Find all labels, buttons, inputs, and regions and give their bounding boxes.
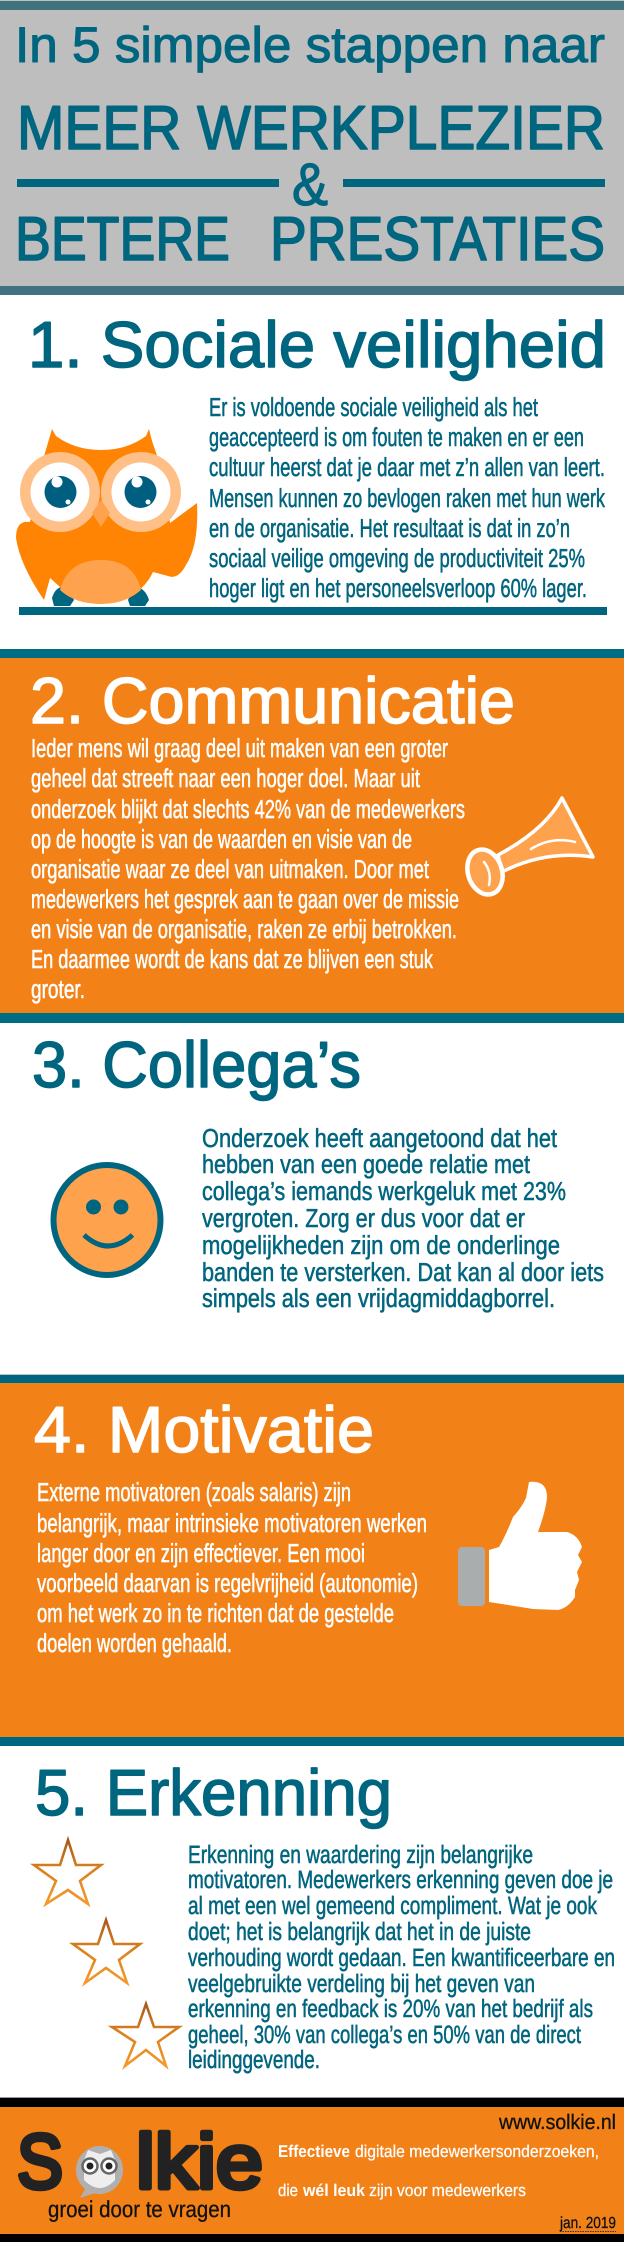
website: www.solkie.nl (498, 2111, 616, 2134)
icon: thumbs up (458, 1482, 582, 1610)
heading: intro line: In 5 simpele stappen naar (15, 17, 605, 73)
panel: 5 erkenning (34, 1756, 615, 2074)
text block: collega's (202, 1123, 604, 1313)
text block: motivatie: doelen worden gehaald. (37, 1628, 232, 1658)
heading: erkenning: 5. Erkenning (35, 1756, 392, 1829)
text block: sociale veiligheid (209, 392, 606, 603)
text block: motivatie (37, 1477, 427, 1658)
icon: smiley (54, 1165, 160, 1275)
heading: betere prestaties (15, 205, 605, 274)
slogan line 2 (278, 2181, 526, 2200)
panel: header (0, 0, 624, 295)
icon: star 2 (73, 1920, 140, 1983)
text block: collega's: vergroten. Zorg er dus voor dat er (202, 1203, 525, 1233)
panel: 1 sociale veiligheid (16, 308, 607, 615)
heading: sociale veiligheid: 1. Sociale veiligheid (28, 308, 606, 381)
text block: erkenning: doet; het is belangrijk dat het in de juiste (188, 1918, 531, 1946)
icon: star 1 (34, 1840, 101, 1904)
text block: communicatie: geheel dat streeft naar een hoger doel. Maar uit (31, 763, 421, 793)
icon: star 3 (112, 2004, 179, 2066)
slogan line 2: die (278, 2181, 298, 2200)
text block: motivatie: om het werk zo in te richten dat de gestelde (37, 1598, 394, 1628)
icon: owl (16, 429, 197, 606)
text block: communicatie: groter. (31, 974, 85, 1004)
slogan line 2: zijn voor medewerkers (369, 2181, 526, 2200)
divider with ampersand (17, 151, 605, 218)
text block: motivatie: langer door en zijn effectiever. Een mooi (37, 1538, 365, 1568)
text block: collega's: Onderzoek heeft aangetoond dat het (202, 1123, 558, 1153)
perch bar (19, 607, 607, 615)
slogan line 1: digitale medewerkersonderzoeken, (355, 2142, 599, 2161)
panel: footer (0, 2097, 624, 2242)
text block: erkenning (188, 1841, 615, 2074)
text block: collega's: mogelijkheden zijn om de onderlinge (202, 1230, 560, 1260)
icon: owl speech bubble (76, 2146, 123, 2198)
logo: solkie: S (17, 2119, 63, 2205)
heading: betere prestaties: BETERE (15, 205, 230, 274)
text block: communicatie: op de hoogte is van de waarden en visie van de (31, 824, 412, 854)
text block: communicatie: En daarmee wordt de kans dat ze blijven een stuk (31, 944, 434, 974)
text block: collega's: simpels als een vrijdagmiddagborrel. (202, 1283, 555, 1313)
heading: motivatie: 4. Motivatie (34, 1393, 374, 1466)
panel: 2 communicatie (0, 649, 624, 1023)
text block: motivatie: Externe motivatoren (zoals salaris) zijn (37, 1477, 351, 1507)
logo: solkie: lkie (136, 2119, 263, 2205)
text block: communicatie: en visie van de organisatie, raken ze erbij betrokken. (31, 914, 457, 944)
logo: solkie (17, 2119, 263, 2205)
text block: communicatie (31, 733, 465, 1004)
icon: horn (462, 798, 593, 899)
tagline: groei door te vragen (48, 2196, 231, 2222)
text block: communicatie: Ieder mens wil graag deel uit maken van een groter (31, 733, 448, 763)
heading: communicatie: 2. Communicatie (30, 664, 515, 737)
text block: motivatie: voorbeeld daarvan is regelvrijheid (autonomie) (37, 1568, 418, 1598)
slogan line 2: wél leuk (302, 2181, 366, 2200)
heading: collega's: 3. Collega’s (32, 1028, 361, 1101)
divider with ampersand: & (292, 151, 328, 218)
slogan line 1: Effectieve (278, 2142, 350, 2161)
text block: communicatie: organisatie waar ze deel van uitmaken. Door met (31, 854, 430, 884)
text block: collega's: hebben van een goede relatie met (202, 1149, 531, 1179)
panel: 4 motivatie (0, 1374, 624, 1746)
text block: motivatie: belangrijk, maar intrinsieke motivatoren werken (37, 1508, 427, 1538)
panel: 3 collega's (32, 1028, 604, 1313)
text block: erkenning: leidinggevende. (188, 2046, 320, 2074)
date: jan. 2019 (559, 2215, 616, 2232)
